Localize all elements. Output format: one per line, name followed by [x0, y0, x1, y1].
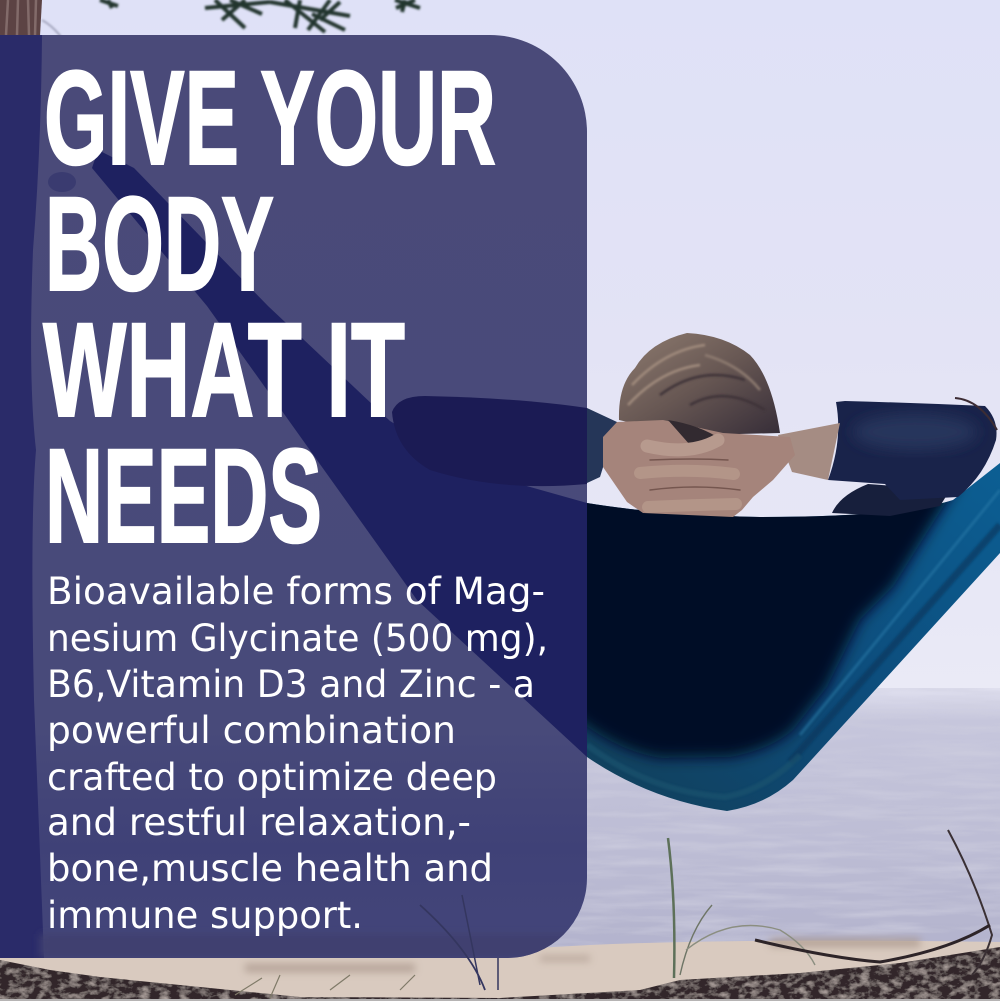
man relaxing — [587, 333, 997, 517]
body text: crafted to optimize deep — [47, 756, 497, 799]
tree trunk top — [0, 0, 42, 36]
hammock strap through panel — [92, 150, 587, 757]
heading: WHAT IT — [43, 296, 405, 445]
ground — [0, 947, 1000, 1001]
forearm right — [778, 423, 840, 480]
beach shadow patches — [245, 938, 920, 972]
body text: immune support. — [47, 894, 363, 937]
hands — [603, 420, 795, 517]
scene seen through panel — [0, 35, 587, 958]
heading: NEEDS — [45, 422, 322, 571]
branch at right edge — [955, 398, 997, 430]
bottom edge line — [0, 999, 1000, 1001]
heading: GIVE YOUR — [44, 44, 496, 193]
fingers — [640, 440, 740, 507]
background: sky — [0, 0, 1000, 700]
hammock — [560, 455, 1000, 815]
far shoreline through panel — [40, 934, 587, 958]
hair strands — [628, 345, 765, 410]
background: sea — [500, 688, 1000, 960]
left sleeve — [587, 408, 617, 483]
heading: BODY — [45, 170, 274, 319]
grass blades and twigs — [235, 830, 992, 998]
hair — [619, 333, 780, 435]
body text: and restful relaxation,- — [47, 801, 471, 844]
gap between fingers — [668, 420, 722, 445]
background: sandy beach — [0, 941, 1000, 1001]
body text: bone,muscle health and — [47, 847, 493, 890]
heading — [43, 44, 496, 571]
trunk through panel — [0, 35, 44, 958]
body text: nesium Glycinate (500 mg), — [47, 617, 548, 660]
body text: powerful combination — [47, 709, 456, 752]
faint foliage through panel — [48, 172, 76, 192]
sleeve highlight — [853, 414, 977, 450]
arm through panel — [392, 396, 587, 486]
shoulder behind — [832, 484, 950, 516]
panel: translucent purple backing — [0, 35, 587, 958]
right sleeve — [828, 401, 997, 500]
body text: B6,Vitamin D3 and Zinc - a — [47, 663, 535, 706]
pine foliage — [42, 0, 420, 55]
body text: Bioavailable forms of Mag- — [47, 570, 545, 613]
body text — [47, 570, 548, 937]
